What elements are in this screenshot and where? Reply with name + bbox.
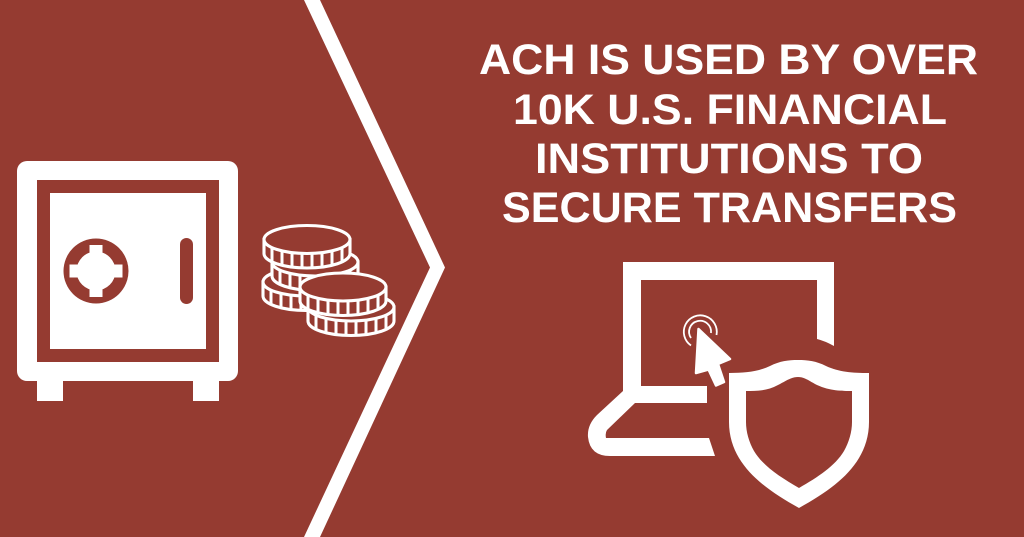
- heading: INSTITUTIONS TO: [535, 136, 923, 183]
- heading: 10K U.S. FINANCIAL: [513, 87, 947, 134]
- icon: coin stacks: [263, 226, 394, 339]
- heading: [479, 37, 978, 232]
- icon: security shield: [729, 360, 869, 508]
- icon: safe: [17, 161, 238, 401]
- icon: laptop with cursor: [588, 262, 834, 456]
- heading: SECURE TRANSFERS: [502, 185, 957, 232]
- heading: ACH IS USED BY OVER: [479, 37, 978, 84]
- chevron divider arrow: [304, 0, 445, 537]
